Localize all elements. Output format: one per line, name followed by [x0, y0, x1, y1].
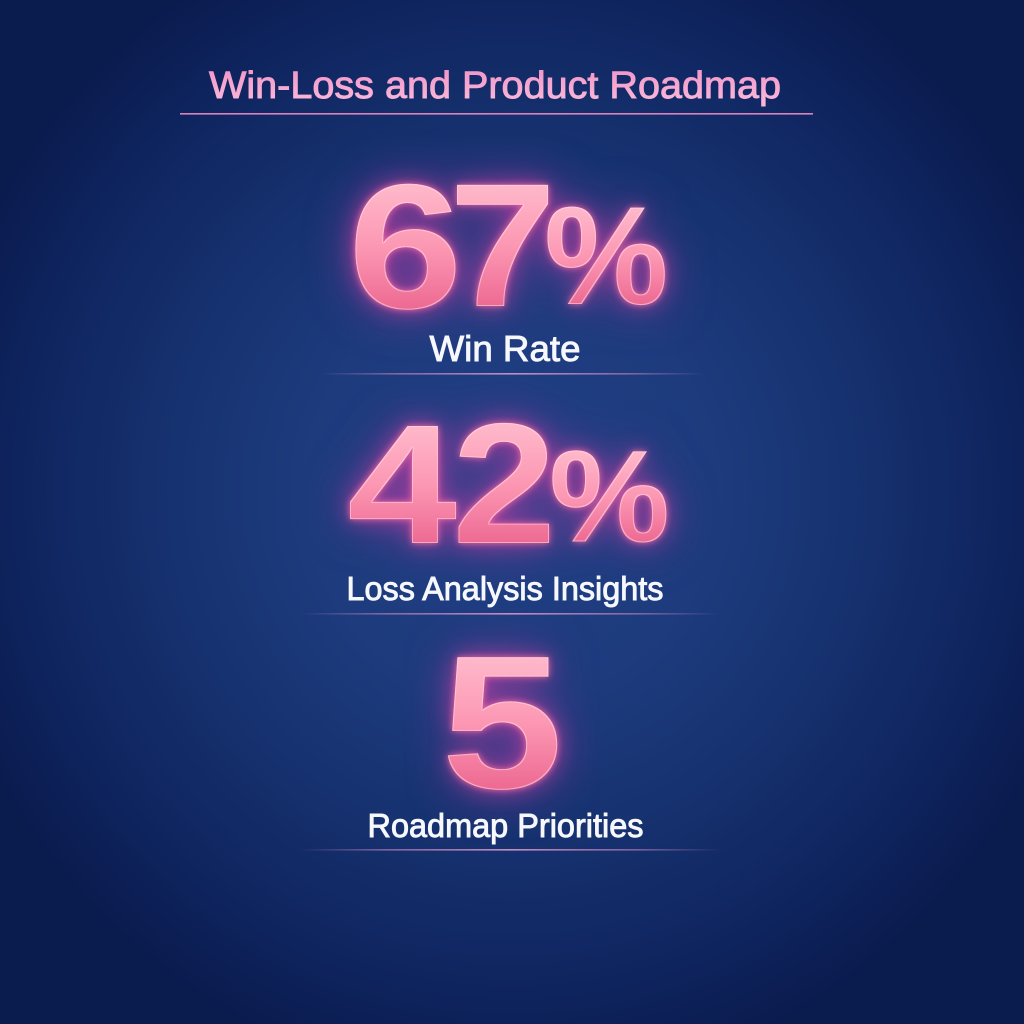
title underline	[180, 113, 813, 115]
label: roadmap priorities: Roadmap Priorities	[368, 807, 644, 844]
title: Win-Loss and Product Roadmap	[209, 65, 781, 107]
number: 42%: %	[549, 424, 670, 570]
number: 67%: 7	[449, 147, 557, 344]
number: 42%	[347, 388, 670, 580]
number: 67%: 6	[348, 147, 463, 346]
number: 67%: %	[544, 177, 668, 334]
label: win rate: Win Rate	[430, 328, 580, 369]
number: 42%: 4	[347, 390, 457, 580]
stat: 67% win rate	[348, 147, 668, 369]
stat: 42% loss analysis insights	[346, 388, 670, 607]
stat: 5 roadmap priorities	[368, 616, 644, 844]
number: 67%	[348, 147, 668, 346]
label: loss analysis insights: Loss Analysis Insights	[346, 570, 664, 607]
number: 42%: 2	[452, 388, 557, 580]
number: 5: 5	[441, 616, 563, 829]
